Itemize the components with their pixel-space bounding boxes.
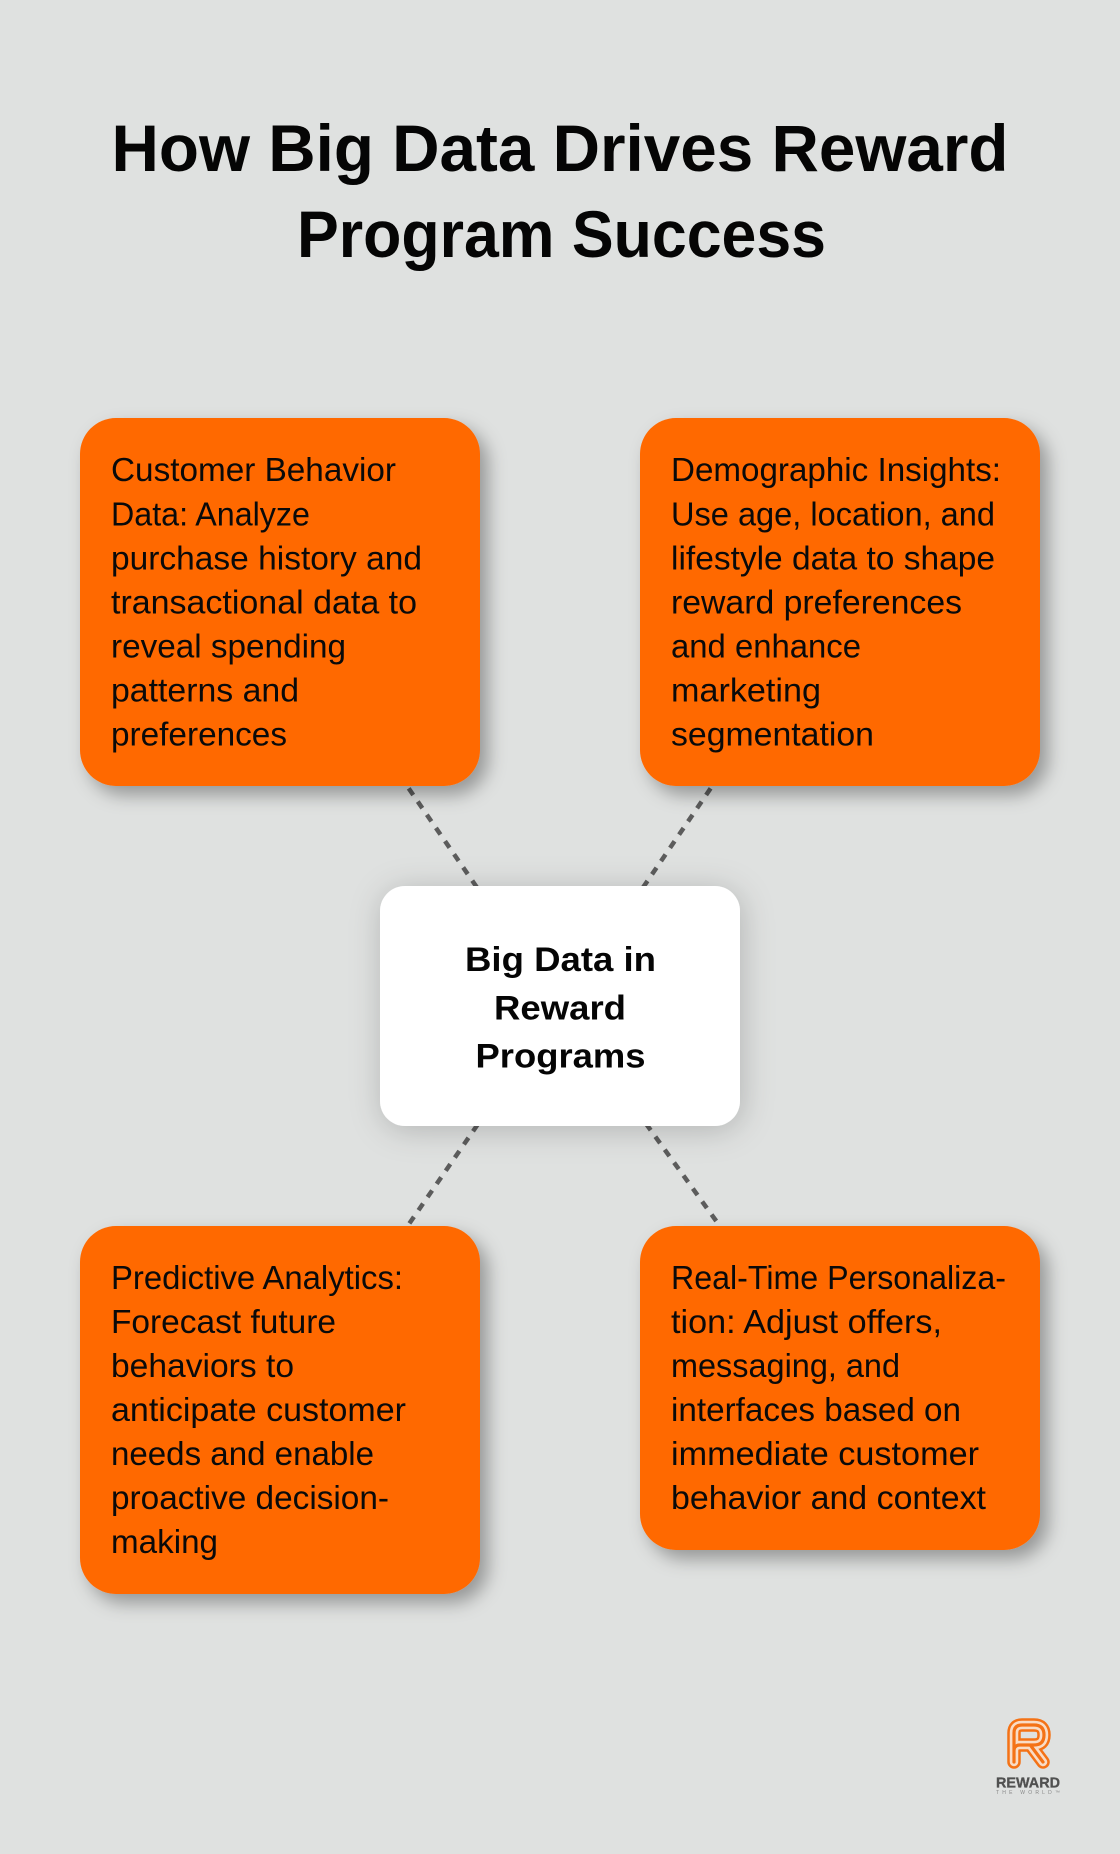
- logo: reward the world: REWARD: [996, 1776, 1060, 1792]
- panel: central topic: Reward: [494, 990, 626, 1028]
- panel: real-time personalization: tion: Adjust offers,: [671, 1303, 942, 1340]
- panel: customer behavior data: preferences: [111, 716, 287, 752]
- panel: customer behavior data: Customer Behavior: [111, 451, 396, 488]
- panel: demographic insights: Use age, location, and: [671, 496, 995, 532]
- panel: demographic insights: lifestyle data to shape: [671, 540, 995, 576]
- title: [112, 111, 1008, 271]
- panel: demographic insights: marketing: [671, 672, 821, 708]
- panel: predictive analytics: needs and enable: [111, 1435, 374, 1472]
- panel: real-time personalization: immediate customer: [671, 1435, 979, 1472]
- title: Program Success: [297, 197, 826, 271]
- panel: central topic: Programs: [476, 1038, 646, 1076]
- panel: predictive analytics: [80, 1226, 480, 1594]
- panel: customer behavior data: reveal spending: [111, 628, 346, 664]
- panel: demographic insights: [640, 418, 1040, 786]
- panel: customer behavior data: [80, 418, 480, 786]
- panel: real-time personalization: interfaces based on: [671, 1391, 961, 1428]
- panel: central topic: [380, 886, 740, 1126]
- icon: stylised letter R: [1014, 1725, 1044, 1762]
- panel: customer behavior data: Data: Analyze: [111, 496, 310, 532]
- panel: customer behavior data: transactional data to: [111, 584, 417, 620]
- panel: predictive analytics: Predictive Analytics:: [111, 1259, 403, 1296]
- logo: reward the world: THE WORLD™: [996, 1790, 1060, 1796]
- panel: predictive analytics: behaviors to: [111, 1347, 294, 1384]
- panel: predictive analytics: making: [111, 1523, 218, 1560]
- panel: predictive analytics: proactive decision-: [111, 1479, 389, 1516]
- panel: real-time personalization: [640, 1226, 1040, 1550]
- panel: predictive analytics: anticipate customer: [111, 1391, 406, 1428]
- panel: real-time personalization: messaging, and: [671, 1347, 900, 1384]
- panel: demographic insights: and enhance: [671, 628, 861, 664]
- title: How Big Data Drives Reward: [112, 111, 1008, 185]
- panel: central topic: Big Data in: [465, 941, 656, 979]
- connector: bottom left: [409, 1124, 478, 1223]
- logo: reward the world: [996, 1725, 1060, 1796]
- panel: predictive analytics: Forecast future: [111, 1303, 336, 1340]
- connector: top left: [409, 788, 478, 889]
- panel: demographic insights: reward preferences: [671, 584, 962, 620]
- panel: real-time personalization: behavior and context: [671, 1479, 986, 1516]
- panel: customer behavior data: patterns and: [111, 672, 299, 708]
- connector: bottom right: [646, 1124, 722, 1229]
- panel: real-time personalization: Real-Time Personaliza-: [671, 1259, 1006, 1296]
- panel: demographic insights: Demographic Insights:: [671, 451, 1001, 488]
- panel: demographic insights: segmentation: [671, 716, 874, 752]
- panel: customer behavior data: purchase history and: [111, 540, 422, 576]
- connector: top right: [642, 788, 711, 889]
